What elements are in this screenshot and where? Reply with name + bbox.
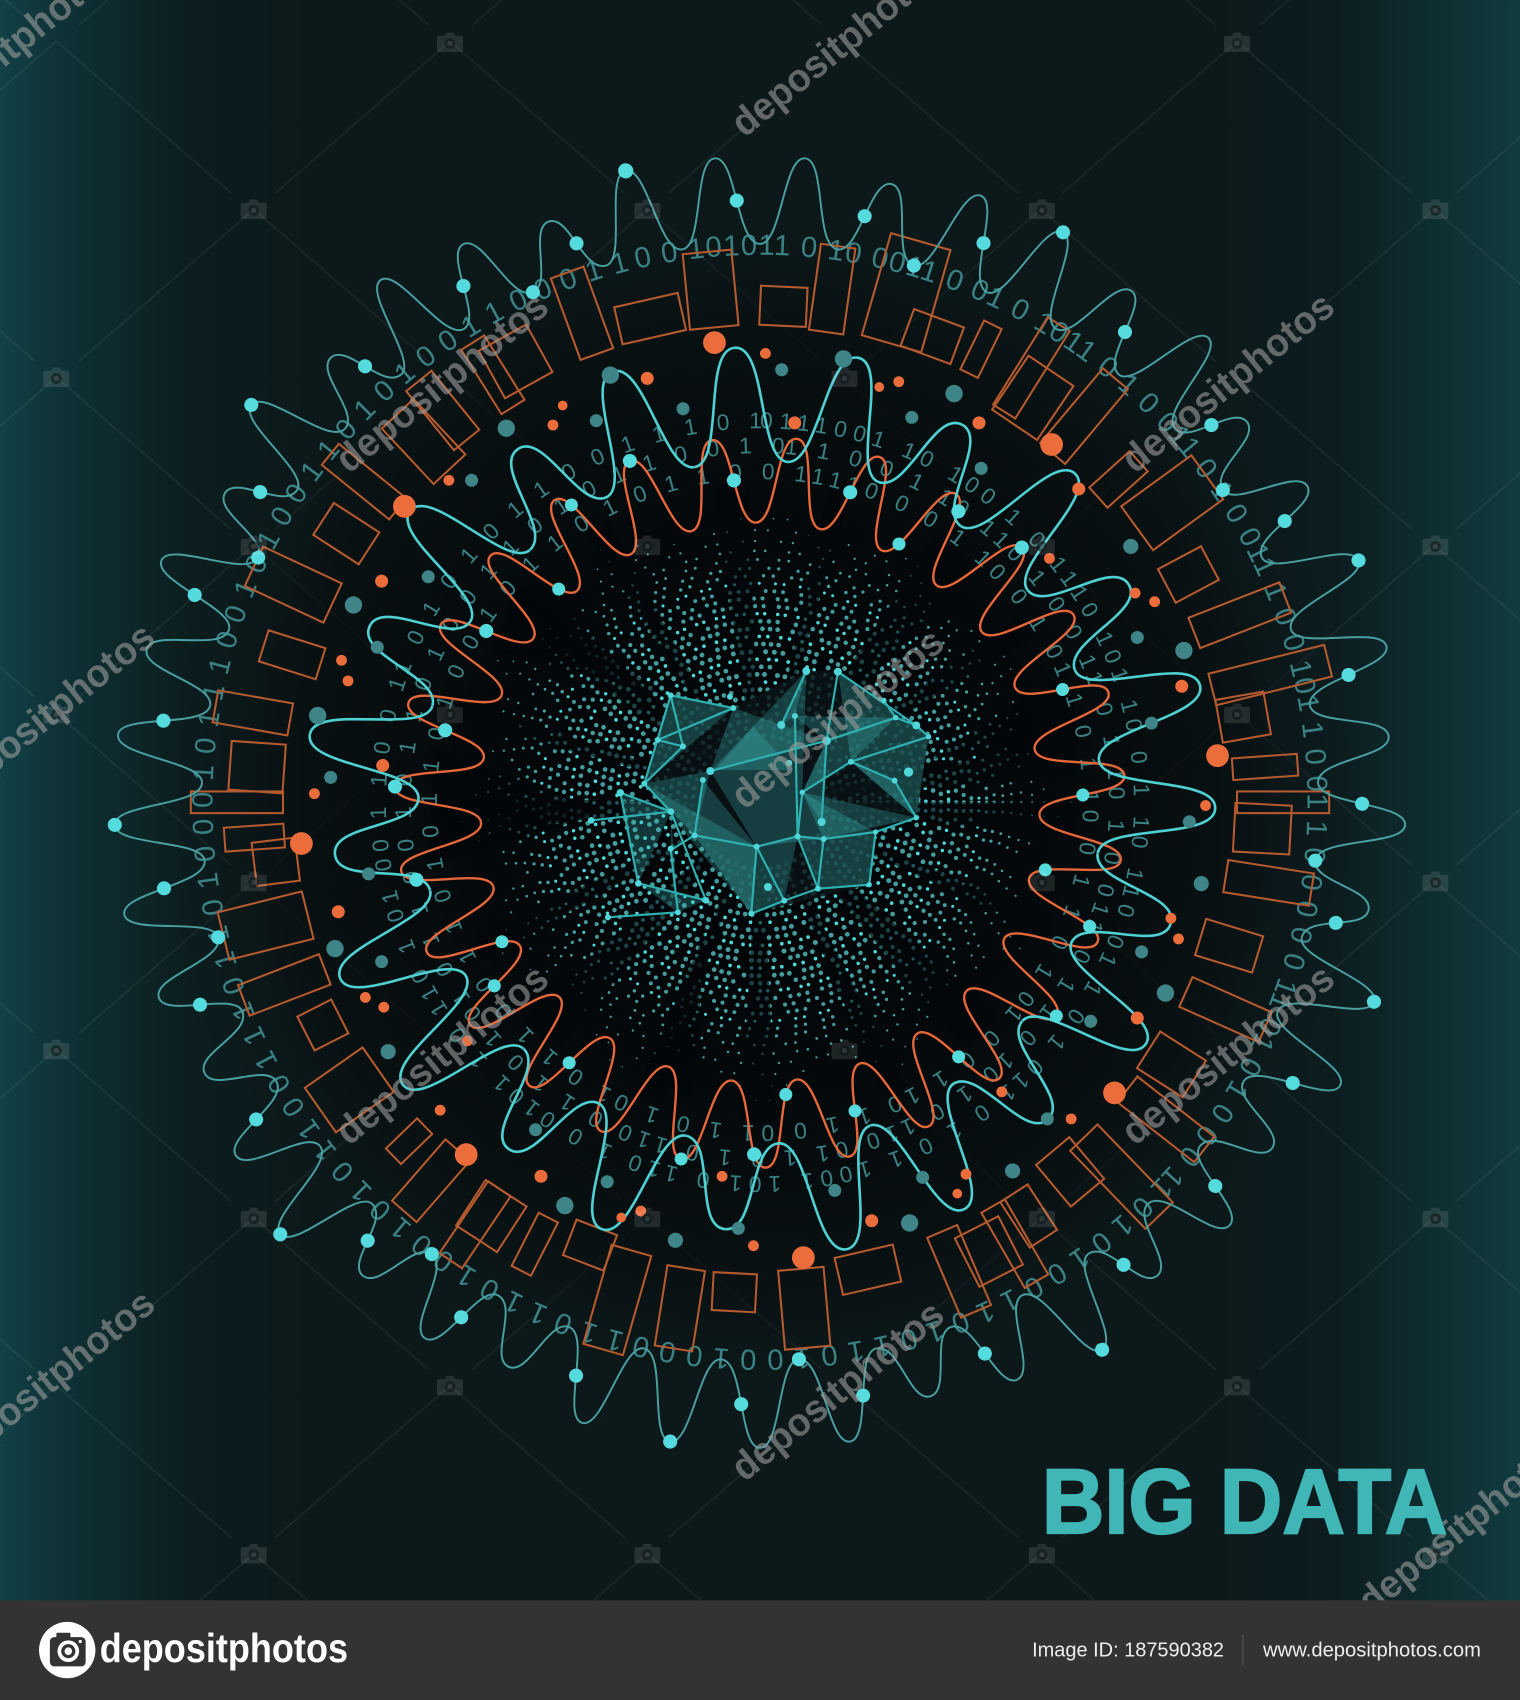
polyhedron edges xyxy=(591,671,929,917)
polyhedron faces xyxy=(620,671,929,914)
bright teal inner wave xyxy=(309,342,1219,1259)
image id: Image ID: 187590382 xyxy=(1032,1640,1224,1662)
diagonal depositphotos watermarks: depositphotos xyxy=(723,620,952,817)
title: BIG DATA: BIG DATA xyxy=(1042,1450,1447,1553)
footer logo wordmark: depositphotos xyxy=(100,1625,348,1671)
polyhedron dark backing xyxy=(644,671,929,914)
diagonal depositphotos watermarks: depositphotos xyxy=(327,284,557,481)
website url: www.depositphotos.com xyxy=(1262,1640,1481,1662)
muted teal dots xyxy=(309,350,1209,1248)
cyan dots on outer wave xyxy=(107,161,1383,1449)
orange dots xyxy=(290,331,1229,1269)
footer logo icon xyxy=(39,1622,95,1678)
binary digit rings xyxy=(192,234,1328,1370)
diagonal depositphotos watermarks: depositphotos xyxy=(327,956,557,1154)
inner binary ring two: 1 1 0 0 1 10 110 1 0 0 11 0 1 10 1 0 011 0 1 1 0 10 1 0 110 01 1 0 1 0 110 0 1 1 0 1 01 0 1 1 0 0 1 0 1 1 0 1 0 0 1 1 0 1 0 1 1 0 0 1 0 1 0 0 1 1 0 1 1 0 1 0 1 0 0 1 0 1 1 xyxy=(395,438,1125,1168)
radial clumping gaps in particle field xyxy=(570,613,950,992)
footer divider xyxy=(1242,1635,1244,1665)
central polyhedron network xyxy=(588,667,931,920)
diagonal depositphotos watermarks: depositphotos xyxy=(723,1292,952,1490)
inner binary ring one: 0111001 10 100 1 0 1110 101 10 0 1 10 110 01 1 0 1 011 0 1 0 1 1001 101 0 110 1 0 0101 1 0 110 1 01 00 1 1 0 0 11 0 1 0 1 0 1 1 0 0 1 1 1 0 1 0 1 0 1 1 0 0 1 0 1 1 0 1 0 0 1 1 xyxy=(370,412,1150,1192)
orange data bars ring xyxy=(191,233,1332,1355)
dark radial gaps in particle field xyxy=(428,585,1079,1095)
inner binary ring three: 1110 0 0 1 10 0 1 01 1 0 1 10 0 1 1 0 1 01 0 0 1 10 1 1 0 01 1 0 1 01 0 1 1 0 0 1 1 0 1 0 1 1 0 1 0 0 1 0 1 1 0 1 0 1 1 0 0 1 0 1 0 1 1 0 1 0 0 1 1 0 xyxy=(421,464,1099,1142)
outer binary ring: 0 0 101011 0 10 0011 0 01 0 1011 0 1 0 011 0 1 0 011 1 0 0 101 1 0 01 1 0 0 0 0 0 11 01 0 1 0 0 0 11 0 1 0 1 0 0 1 1 0 1 0 1 1 0 1 0 0 1 0 0 0 1 1 0 1 1 0 1 0 0 1 0 1 0 1 1 0 0 1 1 1 0 1 1 0 1 0 0 0 1 0 1 1 1 0 0 1 0 1 0 0 1 1 0 1 0 1 0 0 1 1 0 0 0 1 1 1 0 1 0 1 1 0 0 0 1 0 1 0 1 1 0 0 1 0 0 1 1 1 0 1 0 1 0 0 0 1 1 0 1 0 0 1 0 1 1 0 1 0 1 1 0 0 1 0 1 1 0 0 1 1 1 1 0 0 1 1 0 1 0 1 1 0 0 1 0 0 0 1 1 0 1 1 xyxy=(192,234,1328,1370)
particle field xyxy=(449,491,1071,1113)
diagonal depositphotos watermarks: depositphotos xyxy=(1113,956,1343,1154)
orange inner wave xyxy=(393,435,1129,1171)
footer banner xyxy=(0,1600,1520,1700)
diagonal depositphotos watermarks: depositphotos xyxy=(1113,284,1343,481)
cyan dots on orange wave xyxy=(387,451,1098,1166)
outer teal wave xyxy=(111,154,1406,1450)
polyhedron nodes xyxy=(588,667,931,920)
